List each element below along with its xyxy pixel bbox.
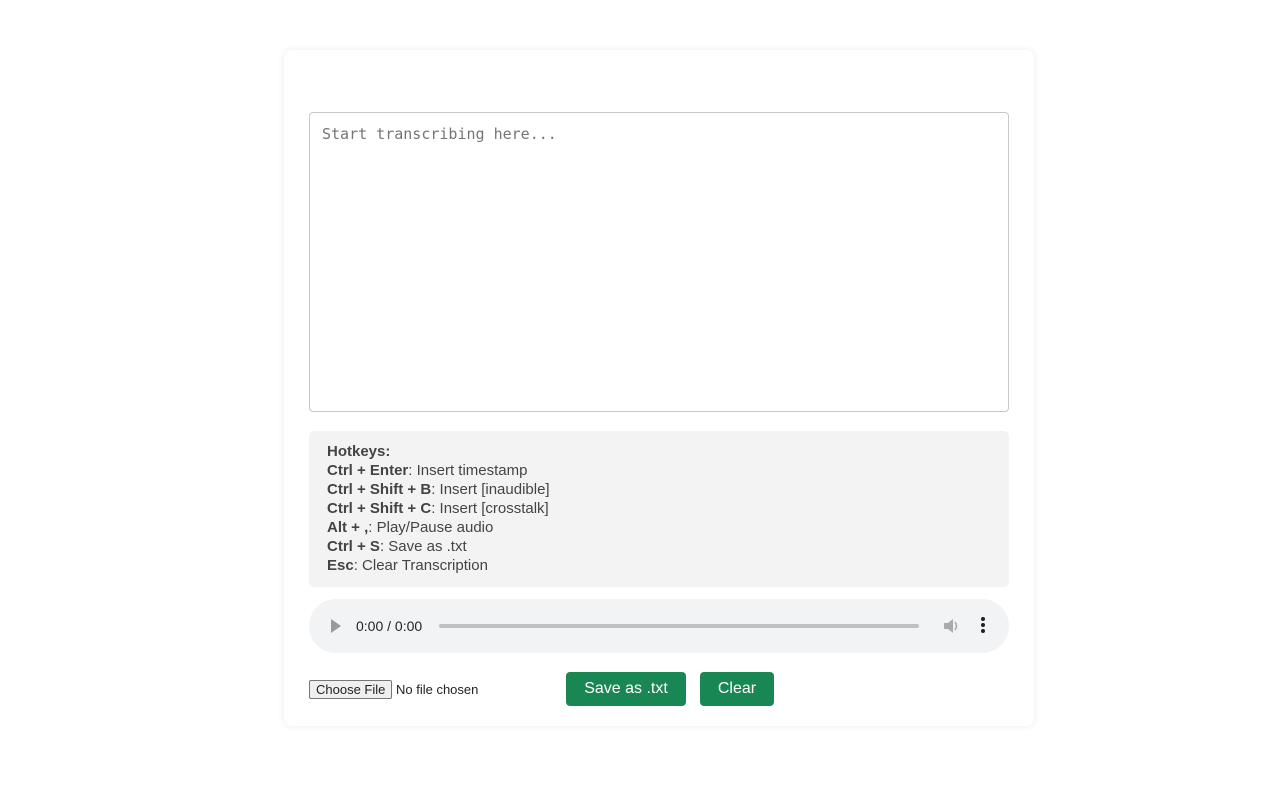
panel: hotkeys: Ctrl + S: Save as .txt — [327, 538, 467, 555]
panel: main card — [284, 50, 1034, 726]
icon: play — [331, 619, 341, 633]
button: clear — [700, 672, 774, 706]
panel: hotkeys: Alt + ,: Play/Pause audio — [327, 519, 493, 536]
textarea: transcription: Start transcribing here... — [322, 125, 557, 143]
panel: hotkeys: Esc: Clear Transcription — [327, 557, 488, 574]
file input — [309, 680, 478, 699]
audio player — [309, 599, 1009, 653]
progress bar — [439, 624, 919, 628]
file input: No file chosen — [396, 682, 478, 697]
button: save: Save as .txt — [584, 680, 668, 697]
file input: Choose File — [316, 682, 385, 697]
panel: hotkeys: Ctrl + Shift + B: Insert [inaudible] — [327, 481, 550, 498]
button: clear: Clear — [718, 680, 756, 697]
button: save — [566, 672, 686, 706]
panel: hotkeys: Hotkeys: — [327, 443, 390, 460]
panel: hotkeys — [309, 431, 1009, 587]
panel: hotkeys: Ctrl + Shift + C: Insert [crosstalk] — [327, 500, 549, 517]
time display: 0:00 / 0:00 — [356, 618, 422, 634]
panel: hotkeys: Ctrl + Enter: Insert timestamp — [327, 462, 527, 479]
icon: menu — [981, 617, 985, 633]
icon: volume — [944, 619, 958, 633]
textarea: transcription — [309, 112, 1009, 412]
